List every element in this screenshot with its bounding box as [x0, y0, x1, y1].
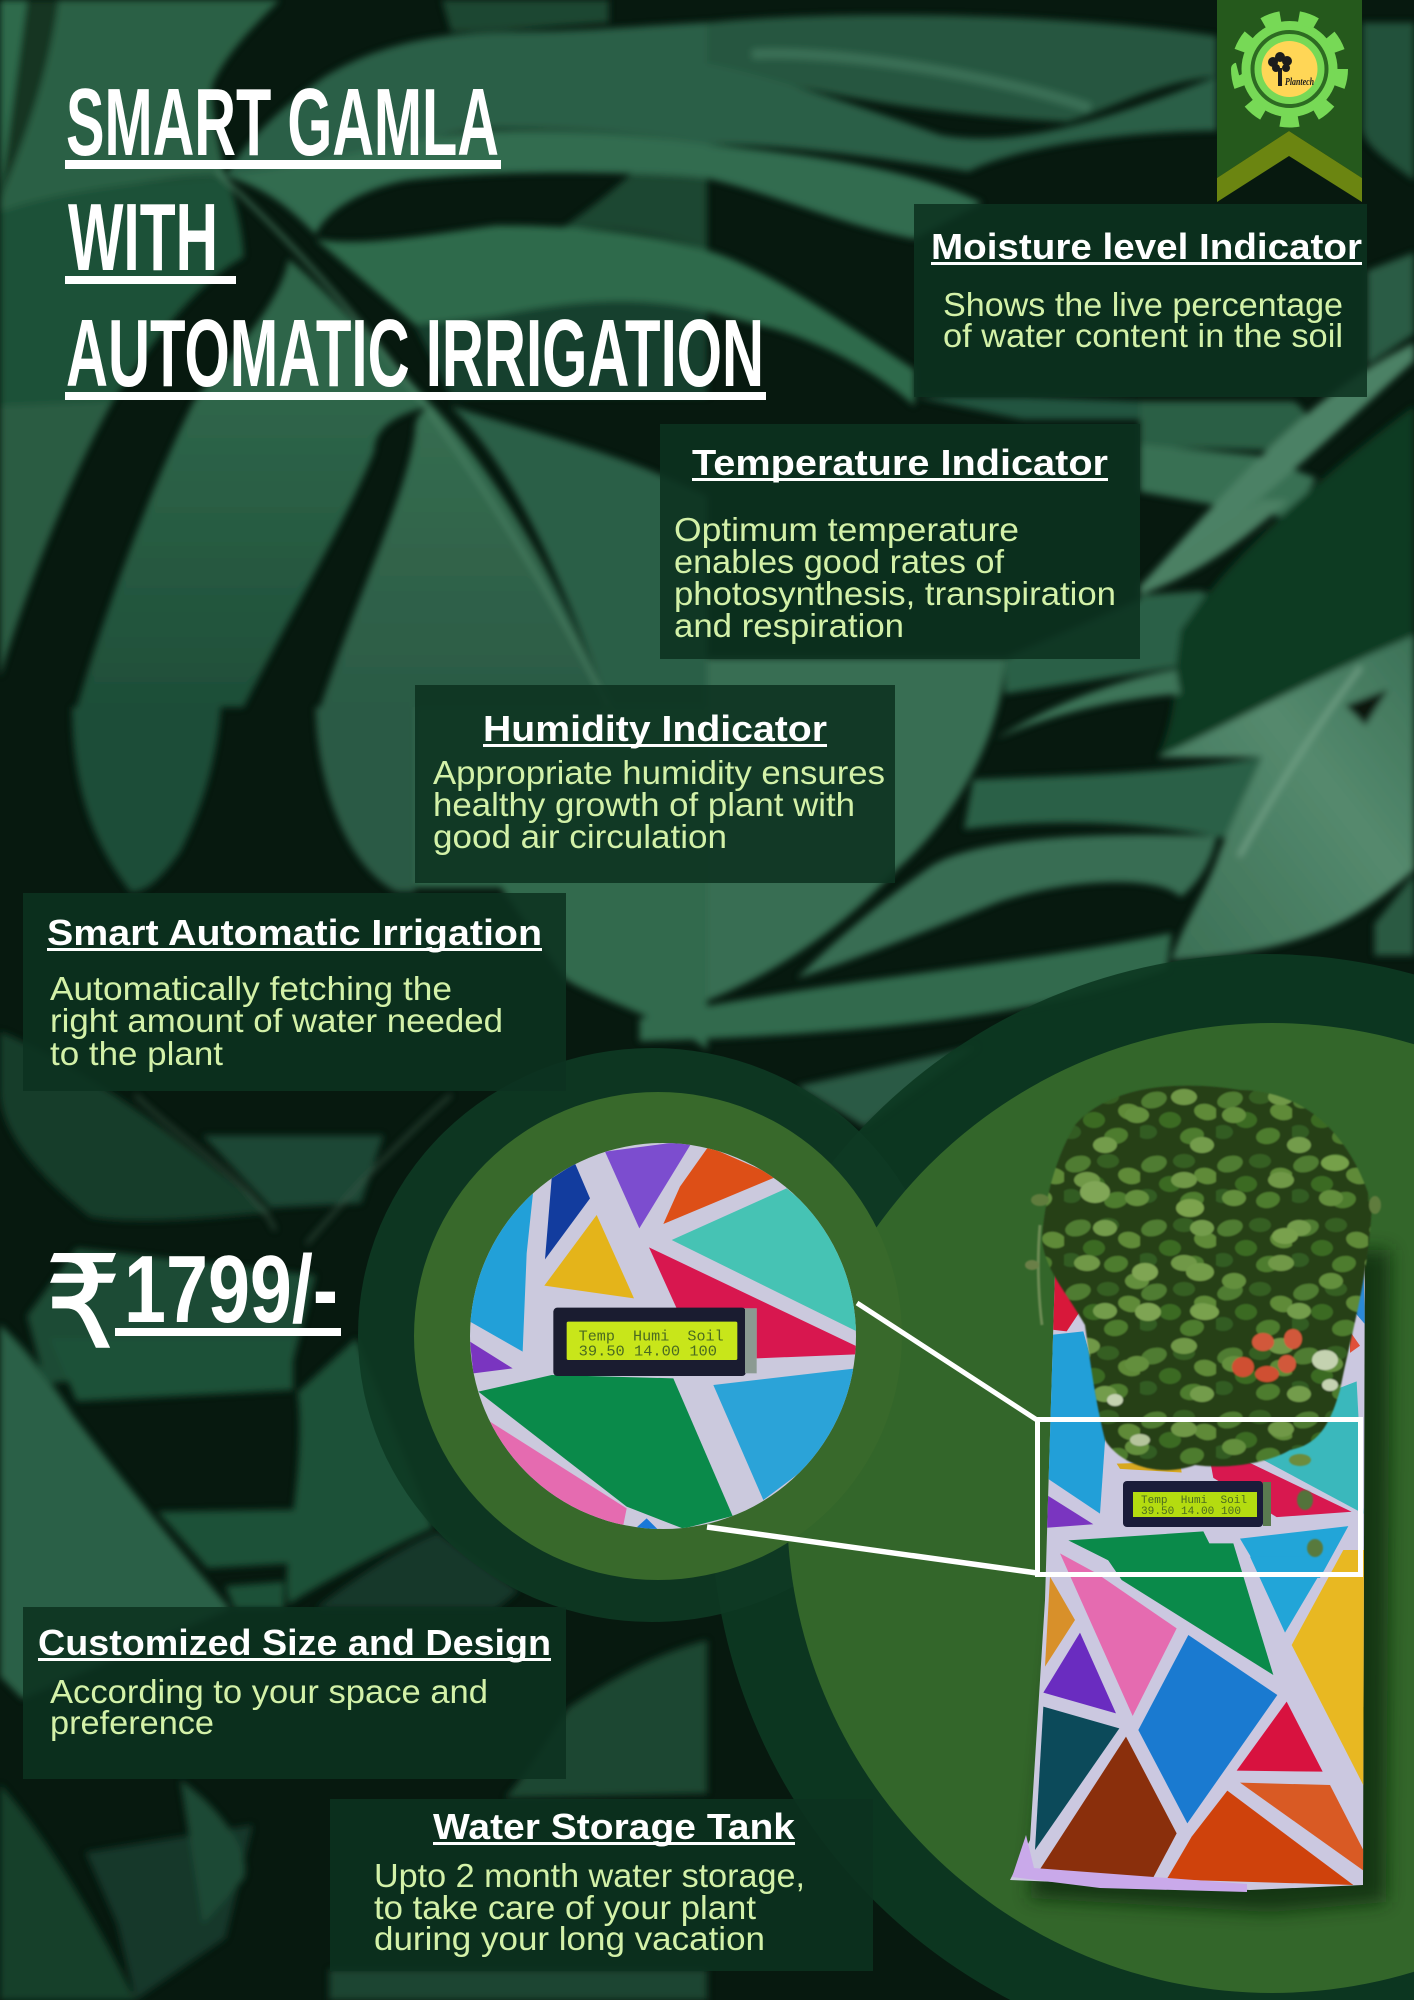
description: Upto 2 month water storage,	[374, 1857, 805, 1894]
gear	[1238, 17, 1342, 121]
panel: customized size and design	[23, 1607, 566, 1779]
description	[674, 511, 1116, 644]
zoom photo: LCD on painted wall	[470, 1143, 856, 1529]
ribbon	[1217, 0, 1362, 178]
title: WITH	[68, 184, 218, 291]
description: and respiration	[674, 607, 904, 644]
zoom connector line: bottom	[707, 1527, 1037, 1573]
small background circle: green ring	[414, 1092, 902, 1580]
description	[943, 286, 1343, 354]
panel: humidity indicator	[415, 685, 895, 883]
description	[50, 970, 503, 1072]
panel: temperature indicator	[660, 424, 1140, 659]
heading: Water Storage Tank	[433, 1806, 796, 1847]
description	[433, 754, 885, 855]
logo ribbon badge	[1217, 0, 1362, 202]
panel: water storage tank	[330, 1799, 873, 1971]
LCD on pot: 39.50 14.00 100	[1141, 1506, 1241, 1518]
LCD on pot: Temp Humi Soil	[1141, 1495, 1247, 1507]
description: to the plant	[50, 1035, 223, 1072]
description: According to your space and	[50, 1673, 488, 1710]
heading: Temperature Indicator	[692, 442, 1108, 483]
small background circle: outer dark	[358, 1048, 946, 1622]
ribbon chevron	[1217, 131, 1362, 202]
title: AUTOMATIC IRRIGATION	[66, 300, 764, 407]
zoom connector line: top	[857, 1303, 1037, 1420]
big background circle: outer dark	[711, 954, 1414, 2000]
description: right amount of water needed	[50, 1002, 503, 1039]
description	[50, 1673, 488, 1741]
description: Optimum temperature	[674, 511, 1019, 548]
heading: Customized Size and Design	[38, 1622, 551, 1663]
description: photosynthesis, transpiration	[674, 575, 1116, 612]
logo wordmark: Plantech	[1285, 77, 1314, 88]
panel: moisture level indicator	[914, 204, 1367, 397]
LCD on pot	[1123, 1481, 1271, 1527]
heading: Moisture level Indicator	[931, 226, 1362, 267]
description: to take care of your plant	[374, 1889, 756, 1926]
description: during your long vacation	[374, 1920, 765, 1957]
heading: Humidity Indicator	[483, 708, 827, 749]
zoom indicator rectangle	[1038, 1420, 1360, 1574]
LCD text: 39.50 14.00 100	[579, 1345, 717, 1361]
heading: Smart Automatic Irrigation	[47, 912, 542, 953]
price: 1799/-	[124, 1236, 338, 1343]
price	[45, 1229, 341, 1378]
tree icon	[1268, 52, 1292, 86]
rupee symbol: ₹	[45, 1229, 121, 1378]
description: Automatically fetching the	[50, 970, 452, 1007]
description: of water content in the soil	[943, 317, 1343, 354]
LCD text	[579, 1330, 723, 1356]
panel: smart automatic irrigation	[23, 893, 566, 1091]
description: Shows the live percentage	[943, 286, 1343, 323]
title	[65, 69, 766, 407]
description: enables good rates of	[674, 543, 1005, 580]
description	[374, 1857, 805, 1957]
product photo: painted pot	[1000, 1086, 1390, 1912]
pot base edge	[1012, 1835, 1247, 1892]
title: SMART GAMLA	[66, 69, 499, 176]
LCD text: Temp Humi Soil	[579, 1330, 724, 1346]
shape: sky blue left	[470, 1194, 533, 1352]
plant foliage	[1025, 1086, 1381, 1557]
description: good air circulation	[433, 818, 727, 855]
description: preference	[50, 1704, 214, 1741]
pot shadow	[1030, 1250, 1390, 1912]
description: healthy growth of plant with	[433, 786, 855, 823]
big background circle: inner green	[787, 1023, 1414, 1993]
description: Appropriate humidity ensures	[433, 754, 885, 791]
